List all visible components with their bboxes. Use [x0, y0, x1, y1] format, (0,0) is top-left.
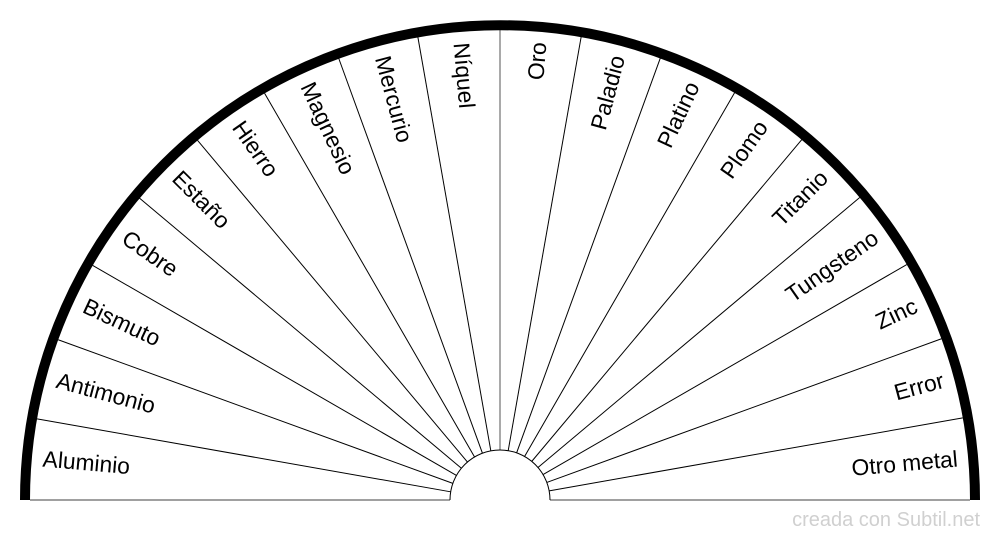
- label: Titanio: Titanio: [767, 165, 833, 231]
- label: Bismuto: Bismuto: [79, 293, 165, 351]
- label: Hierro: Hierro: [227, 116, 284, 181]
- label: Otro metal: Otro metal: [850, 446, 959, 481]
- label: Tungsteno: Tungsteno: [781, 225, 883, 307]
- label: Paladio: Paladio: [585, 52, 630, 133]
- label: Platino: Platino: [652, 77, 705, 152]
- label: Estaño: Estaño: [167, 165, 236, 234]
- label: Aluminio: Aluminio: [42, 446, 131, 479]
- label: Oro: Oro: [522, 41, 552, 81]
- label: Magnesio: Magnesio: [296, 78, 361, 178]
- label: Zinc: Zinc: [871, 293, 921, 334]
- label: Cobre: Cobre: [117, 225, 183, 282]
- label: Níquel: Níquel: [449, 41, 480, 109]
- label: Plomo: Plomo: [715, 115, 773, 183]
- inner arc: [450, 450, 550, 500]
- label: Error: Error: [891, 367, 947, 405]
- label: Mercurio: Mercurio: [370, 53, 418, 145]
- label: Antimonio: Antimonio: [54, 367, 158, 419]
- watermark credit: creada con Subtil.net: [792, 509, 980, 531]
